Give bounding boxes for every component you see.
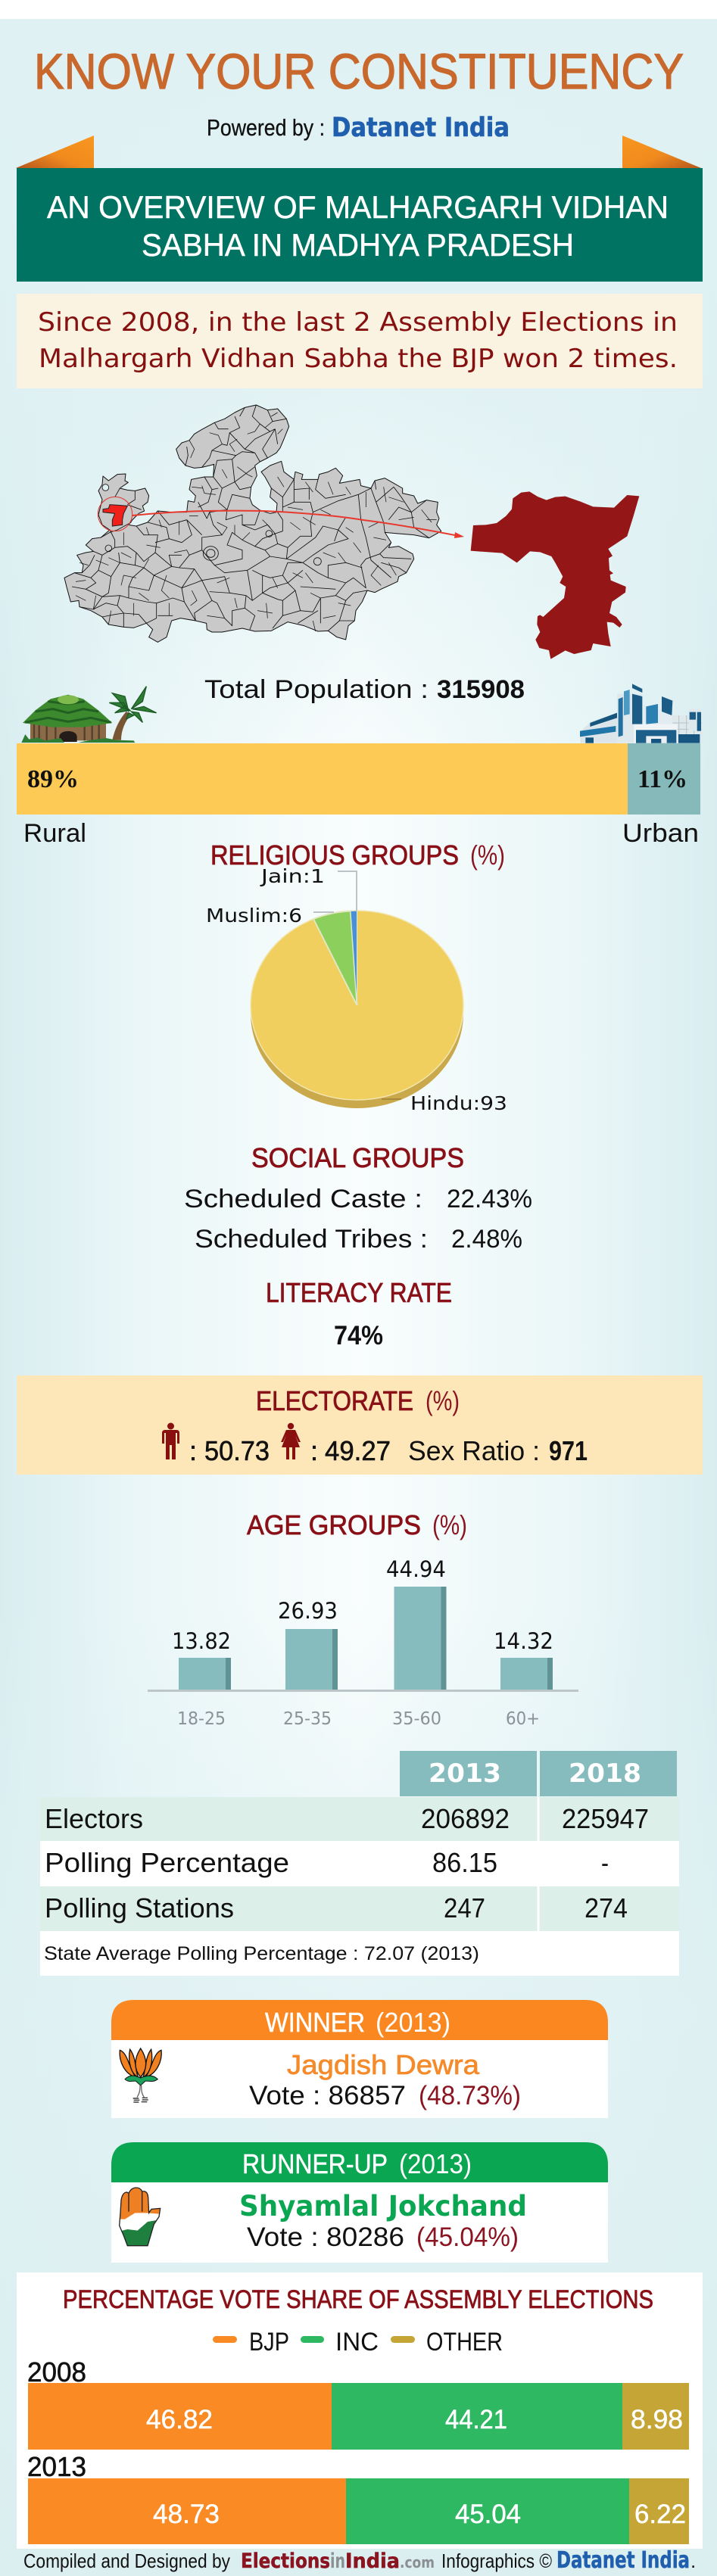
electors and polling table: 274 [585,1892,628,1923]
panel: electorate: (%) [426,1385,460,1416]
panel: percentage vote share [17,2272,703,2549]
pie chart: religious groups: Muslim:6 [206,905,302,927]
electors and polling table: Electors [45,1803,143,1834]
stacked bar 2008: 46.82 [146,2405,213,2434]
stacked bar 2013: 6.22 [634,2500,686,2529]
arrow from map to constituency [132,511,464,538]
panel: electorate: 49.27 [325,1435,391,1466]
bar chart: age groups: 35-60 [392,1709,441,1729]
icon: man [162,1423,179,1459]
total population [204,675,525,704]
panel: electorate: 50.73 [204,1435,270,1466]
electors and polling table: Polling Percentage [45,1847,289,1878]
bar chart: age groups [148,1556,578,1729]
panel: winner: (2013) [376,2007,450,2038]
pie chart: religious groups: Hindu:93 [410,1092,507,1114]
literacy rate value: 74% [334,1321,383,1350]
stacked bar 2013: 2013 [27,2451,86,2482]
bar chart: age groups: 60+ [506,1709,540,1729]
electors and polling table: 206892 [421,1803,510,1834]
panel: electorate: : [189,1435,197,1466]
ribbon fold left [16,135,94,168]
religious groups heading: RELIGIOUS GROUPS [210,839,459,871]
electors and polling table [40,1751,679,1976]
pie chart: religious groups: Jain:1 [260,865,325,887]
powered by line: Datanet India [332,113,510,143]
stacked bar 2008 [27,2356,689,2450]
stacked bar 2013: 45.04 [455,2500,521,2529]
constituency shape [471,491,639,659]
powered by line: Powered by : [207,114,325,141]
stacked bar 2008: 44.21 [445,2405,507,2434]
heading banner: SABHA IN MADHYA PRADESH [142,227,574,263]
panel: electorate: : [310,1435,318,1466]
panel: winner [111,2000,608,2118]
social groups heading: SOCIAL GROUPS [251,1142,464,1173]
icon: woman [281,1423,301,1459]
electors and polling table: 2013 [429,1758,501,1789]
powered by line [207,113,510,143]
footer credits: . [691,2550,696,2572]
icon: lotus [120,2048,161,2102]
electors and polling table: 247 [444,1892,485,1923]
footer credits: in [330,2550,345,2573]
icon: rural hut and palm [21,687,157,743]
panel: electorate [17,1375,703,1475]
summary callout: Malhargarh Vidhan Sabha the BJP won 2 times. [39,344,678,374]
bar chart: age groups: 25-35 [283,1709,332,1729]
panel: winner: (48.73%) [419,2081,521,2110]
ribbon fold right [622,135,701,168]
panel: electorate: 971 [549,1435,588,1466]
footer credits: Elections [241,2550,330,2573]
stacked bar 2008: 8.98 [631,2405,683,2434]
electors and polling table: Polling Stations [45,1892,234,1923]
panel: runner-up: (2013) [399,2148,472,2179]
electors and polling table: State Average Polling Percentage : 72.07 (2013) [44,1943,479,1964]
social groups values: Scheduled Tribes : [195,1225,428,1254]
footer credits: India [345,2550,400,2573]
literacy rate heading: LITERACY RATE [266,1277,452,1308]
rural label: Rural [23,819,86,848]
panel: runner-up: (45.04%) [416,2222,519,2252]
social groups values: 2.48% [451,1225,522,1254]
icon: hand [117,2186,163,2247]
footer credits: Compiled and Designed by [23,2550,230,2572]
panel: runner-up [111,2142,608,2263]
legend: OTHER [426,2328,503,2356]
rural urban split bar: 89% [27,765,79,793]
total population: 315908 [437,675,525,704]
social groups values [184,1185,532,1254]
legend: INC [335,2328,379,2356]
panel: runner-up: Shyamlal Jokchand [239,2190,527,2222]
bar chart: age groups: 44.94 [386,1556,446,1582]
bar chart: age groups: 13.82 [172,1628,231,1654]
stacked bar 2008: 2008 [27,2356,86,2388]
social groups values: Scheduled Caste : [184,1185,422,1213]
panel: runner-up: Vote : 80286 [247,2222,404,2252]
panel: winner: Vote : 86857 [249,2081,406,2110]
legend [213,2328,503,2356]
electors and polling table: - [601,1847,609,1878]
heading banner [17,168,703,282]
age groups heading: AGE GROUPS [247,1509,421,1540]
panel: runner-up: RUNNER-UP [242,2148,388,2179]
panel: electorate: Sex Ratio : [408,1435,540,1466]
age groups heading: (%) [432,1509,467,1540]
summary callout: Since 2008, in the last 2 Assembly Elections in [38,307,678,338]
stacked bar 2013 [27,2451,689,2544]
panel: winner: WINNER [265,2007,365,2038]
rural urban split bar [17,743,700,815]
social groups values: 22.43% [447,1185,532,1213]
bar chart: age groups: 14.32 [494,1628,553,1654]
stacked bar 2013: 48.73 [153,2500,220,2529]
bar chart: age groups: 18-25 [177,1709,226,1729]
electors and polling table: 2018 [569,1758,641,1789]
legend: BJP [249,2328,289,2356]
summary callout [17,294,703,388]
panel: electorate: ELECTORATE [256,1385,413,1416]
footer credits: .com [400,2553,435,2571]
map of Madhya Pradesh [64,405,441,642]
total population: Total Population : [204,675,429,704]
electors and polling table: 225947 [562,1803,649,1834]
heading banner: AN OVERVIEW OF MALHARGARH VIDHAN [47,189,669,225]
electors and polling table: 86.15 [432,1847,497,1878]
religious groups heading: (%) [470,839,505,871]
footer credits [23,2547,696,2574]
urban label: Urban [622,819,699,848]
rural urban split bar: 11% [638,765,687,793]
panel: winner: Jagdish Dewra [287,2049,480,2080]
icon: urban buildings [580,684,702,743]
footer credits: Infographics © [441,2550,552,2572]
bar chart: age groups: 26.93 [278,1598,338,1624]
pie chart: religious groups [206,865,507,1114]
